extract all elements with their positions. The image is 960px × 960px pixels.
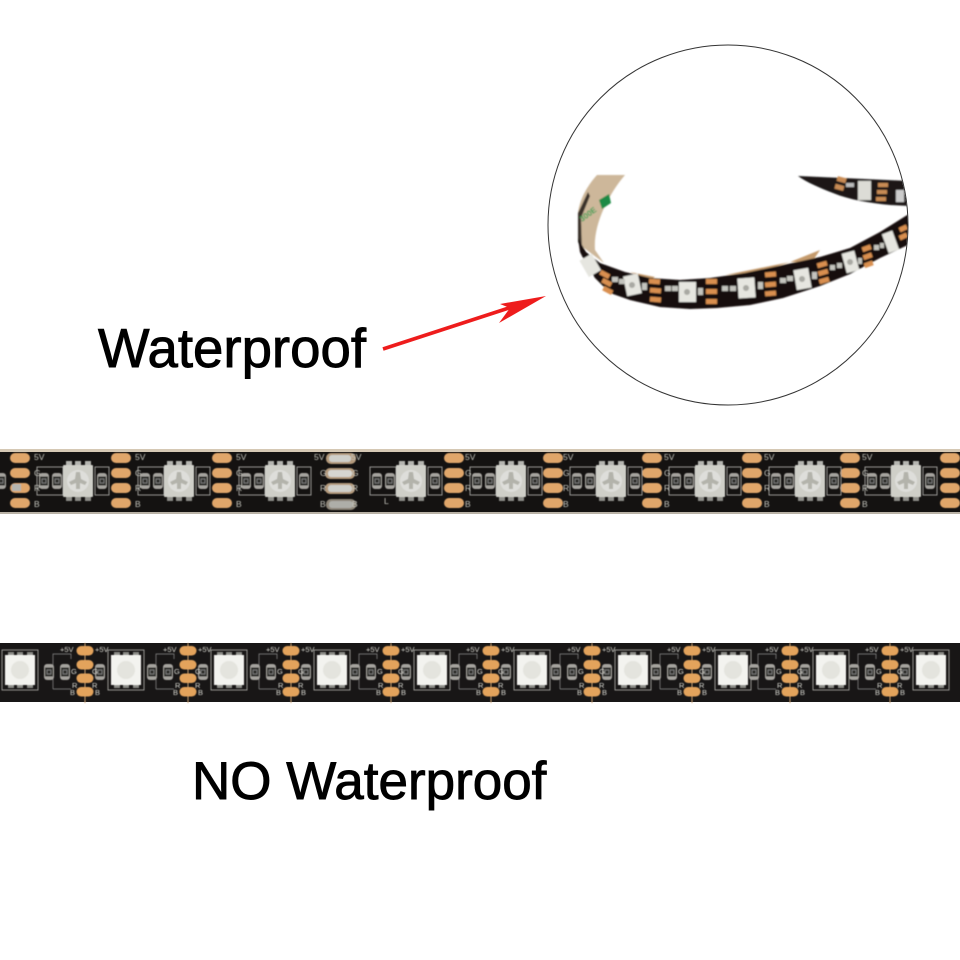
- silk labels: +5V: [198, 645, 212, 654]
- silk labels: G: [135, 468, 142, 478]
- LEDs on lower strip: [579, 231, 899, 302]
- lower strip body: [578, 212, 912, 309]
- silk labels: G: [699, 667, 705, 676]
- silk labels: B: [401, 688, 406, 697]
- silk labels: G: [34, 468, 41, 478]
- silk labels: B: [563, 499, 569, 509]
- silk labels: G: [599, 667, 605, 676]
- silk labels: L: [384, 496, 389, 506]
- silk labels: R: [664, 483, 670, 493]
- silk labels: G: [797, 667, 803, 676]
- tape backing: [578, 175, 625, 263]
- silk labels: +5V: [366, 645, 380, 654]
- silk labels: +5V: [466, 645, 480, 654]
- silk labels: 5V: [764, 452, 775, 462]
- silk labels: R: [699, 681, 705, 690]
- silk labels: G: [352, 468, 359, 478]
- silk labels: B: [352, 499, 358, 509]
- silk labels: G: [236, 468, 243, 478]
- silk labels: G: [876, 667, 882, 676]
- silk labels: B: [900, 688, 905, 697]
- silk labels: B: [664, 499, 670, 509]
- silk labels: R: [465, 483, 471, 493]
- silk labels: B: [236, 499, 242, 509]
- title: Waterproof label: Waterproof: [98, 318, 367, 379]
- title: NO Waterproof label: NO Waterproof: [192, 752, 547, 811]
- silk labels: R: [679, 681, 685, 690]
- silk labels: B: [800, 688, 805, 697]
- upper strip details: [834, 176, 904, 202]
- arrow: pointing to circular photo: [383, 296, 546, 349]
- silk labels: B: [677, 688, 682, 697]
- silk labels: R: [563, 483, 569, 493]
- silk labels: G: [776, 667, 782, 676]
- silk labels: B: [465, 499, 471, 509]
- silk labels: R: [764, 483, 770, 493]
- silk labels: B: [376, 688, 381, 697]
- silk labels: R: [175, 681, 181, 690]
- silk labels: B: [775, 688, 780, 697]
- silk labels: R: [278, 681, 284, 690]
- silk labels: +5V: [602, 645, 616, 654]
- silk labels: +5V: [301, 645, 315, 654]
- silk labels: B: [135, 499, 141, 509]
- silk labels: +5V: [800, 645, 814, 654]
- silk labels: B: [875, 688, 880, 697]
- silk labels: 5V: [34, 452, 45, 462]
- silk labels: B: [501, 688, 506, 697]
- silk labels: R: [897, 681, 903, 690]
- silk labels: B: [301, 688, 306, 697]
- silk labels: B: [173, 688, 178, 697]
- silk labels: G: [897, 667, 903, 676]
- silk labels: G: [377, 667, 383, 676]
- silk labels: B: [577, 688, 582, 697]
- silk labels: R: [378, 681, 384, 690]
- silk labels: R: [877, 681, 883, 690]
- silk labels: G: [764, 468, 771, 478]
- panel: non-waterproof LED strip: [0, 643, 960, 703]
- silk labels: G: [563, 468, 570, 478]
- silk labels: B: [70, 688, 75, 697]
- silk labels: R: [72, 681, 78, 690]
- silk labels: R: [236, 483, 242, 493]
- silk labels: G: [320, 468, 327, 478]
- silk labels: G: [398, 667, 404, 676]
- silk labels: B: [320, 499, 326, 509]
- silk labels: B: [702, 688, 707, 697]
- silk labels: B: [276, 688, 281, 697]
- silk labels: 5V: [465, 452, 476, 462]
- silk labels: G: [92, 667, 98, 676]
- silk labels: R: [862, 483, 868, 493]
- silk labels: R: [599, 681, 605, 690]
- silk labels: B: [95, 688, 100, 697]
- silk labels: R: [398, 681, 404, 690]
- silk labels: 5V: [236, 452, 247, 462]
- silk labels: R: [298, 681, 304, 690]
- silk labels: +5V: [765, 645, 779, 654]
- silk labels: +5V: [667, 645, 681, 654]
- silk labels: +5V: [401, 645, 415, 654]
- silk labels: +5V: [95, 645, 109, 654]
- silk labels: B: [476, 688, 481, 697]
- silk labels: +5V: [501, 645, 515, 654]
- silk labels: 5V: [664, 452, 675, 462]
- copper pads on lower strip: [599, 224, 908, 304]
- silk labels: G: [277, 667, 283, 676]
- silk labels: 5V: [351, 452, 362, 462]
- silk labels: R: [135, 483, 141, 493]
- silk labels: R: [498, 681, 504, 690]
- silk labels: +5V: [163, 645, 177, 654]
- silk labels: R: [320, 483, 326, 493]
- solder joint: [325, 453, 356, 510]
- silk labels: B: [602, 688, 607, 697]
- silk labels: R: [579, 681, 585, 690]
- panel: waterproof LED strip: [0, 449, 960, 514]
- silk labels: R: [92, 681, 98, 690]
- silk labels: +5V: [865, 645, 879, 654]
- resistors on lower strip: [612, 243, 884, 295]
- silk labels: G: [477, 667, 483, 676]
- silk labels: G: [195, 667, 201, 676]
- silk labels: G: [498, 667, 504, 676]
- silk labels: G: [664, 468, 671, 478]
- silk labels: G: [862, 468, 869, 478]
- silk labels: B: [198, 688, 203, 697]
- silk labels: B: [862, 499, 868, 509]
- silk labels: G: [298, 667, 304, 676]
- silk labels: +5V: [900, 645, 914, 654]
- silk labels: +5V: [266, 645, 280, 654]
- silk labels: R: [352, 483, 358, 493]
- panel: circular close-up photo: 300E: [578, 205, 599, 224]
- silk labels: B: [764, 499, 770, 509]
- silk labels: R: [195, 681, 201, 690]
- panel: circular close-up photo: [548, 45, 912, 405]
- silk labels: B: [34, 499, 40, 509]
- silk labels: R: [478, 681, 484, 690]
- silk labels: G: [578, 667, 584, 676]
- silk labels: R: [34, 483, 40, 493]
- silk labels: G: [71, 667, 77, 676]
- silk labels: +5V: [567, 645, 581, 654]
- silk labels: 5V: [135, 452, 146, 462]
- silk labels: R: [797, 681, 803, 690]
- silk labels: R: [777, 681, 783, 690]
- silk labels: +5V: [702, 645, 716, 654]
- silk labels: 5V: [314, 452, 325, 462]
- silk labels: 5V: [862, 452, 873, 462]
- silk labels: 5V: [563, 452, 574, 462]
- silk labels: G: [174, 667, 180, 676]
- silk labels: +5V: [60, 645, 74, 654]
- silk labels: G: [465, 468, 472, 478]
- upper strip body: [798, 176, 910, 206]
- silk labels: G: [678, 667, 684, 676]
